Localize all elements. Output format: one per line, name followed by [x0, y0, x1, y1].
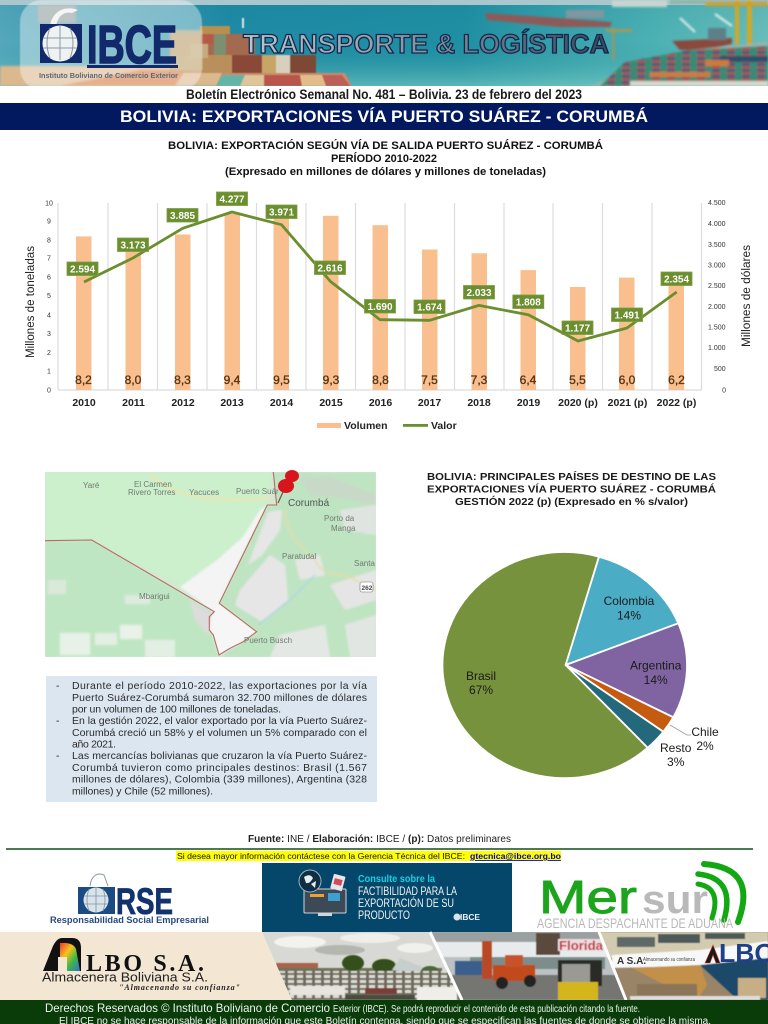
- gridlines: [58, 203, 702, 390]
- right axis ticks: 2.500: [708, 283, 726, 290]
- text block: key findings: -: [56, 715, 60, 727]
- text block: key findings: Corumbá creció un 58% y el volumen un 5% comparado con el: [72, 727, 367, 739]
- line value labels: [67, 192, 692, 334]
- text block: key findings: año 2021.: [72, 738, 116, 750]
- text block: key findings: [46, 676, 377, 802]
- icon: red map pins: [278, 470, 299, 503]
- pie labels: 2%: [696, 739, 714, 753]
- right axis ticks: 3.000: [708, 262, 726, 270]
- logo: RSE: RSE: [116, 881, 173, 922]
- map: Puerto Suárez - Corumbá: Corumbá: [288, 498, 330, 509]
- combo chart: volume bars and value line: 1.674: [417, 302, 442, 314]
- year labels: 2016: [369, 397, 392, 409]
- slice: Resto: [566, 665, 663, 748]
- right axis ticks: 1.500: [708, 324, 726, 332]
- logo: ALBO: LBO S.A.: [86, 951, 204, 977]
- banner: factibilidad: Consulte sobre la: [358, 874, 435, 885]
- bottom banner: ALBO photos: [0, 932, 768, 1000]
- contact note: Si desea mayor información contáctese con la Gerencia Técnica del IBCE:: [177, 851, 465, 861]
- legend: Volumen: [344, 420, 388, 432]
- bar value labels: 9,3: [323, 373, 340, 387]
- banner: factibilidad: [262, 863, 512, 933]
- line: valor: [84, 212, 677, 341]
- left axis ticks: 4: [47, 312, 51, 320]
- text block: key findings: -: [56, 750, 60, 762]
- photo: vehicle yard: [262, 932, 465, 1000]
- legend: [317, 420, 457, 432]
- icon: signal arcs: [698, 864, 743, 922]
- bar value labels: 9,4: [224, 373, 241, 387]
- photo: forklifts and aircraft: Florida: [559, 938, 604, 953]
- footer band: Exterior (IBCE). Se podrá reproducir el contenido de esta publicación citando la fuente.: [333, 1004, 640, 1015]
- year labels: 2018: [467, 397, 491, 409]
- map place names: Paratudal: [282, 552, 316, 561]
- contact note: gtecnica@ibce.org.bo: [470, 851, 561, 861]
- combo chart: volume bars and value line: 1.808: [516, 298, 541, 308]
- year labels: 2015: [319, 397, 343, 409]
- divider line: [6, 848, 753, 850]
- chart title: BOLIVIA: EXPORTACIÓN SEGÚN VÍA DE SALIDA PUERTO SUÁREZ - CORUMBÁ: [168, 139, 603, 152]
- map regions: [45, 472, 273, 587]
- combo chart: volume bars and value line: 2.354: [664, 274, 689, 286]
- pie labels: Resto: [660, 741, 692, 755]
- right axis ticks: 0: [722, 388, 726, 394]
- bar value labels: 8,8: [372, 373, 389, 387]
- photo: warehouse: Almacenando su confianza: [643, 957, 695, 963]
- map place names: Puerto Busch: [244, 636, 292, 645]
- photo: warehouse: [600, 932, 768, 1000]
- header banner: port and sea photo: [0, 0, 768, 90]
- map place names: [83, 480, 375, 645]
- bars: volumen: [76, 212, 684, 390]
- logo: ALBO: [42, 938, 240, 992]
- left axis ticks: 3: [47, 331, 51, 338]
- year labels: 2020 (p): [558, 397, 598, 409]
- photo: forklifts and aircraft: [430, 932, 630, 1000]
- bar value labels: 9,5: [273, 373, 290, 387]
- combo chart: volume bars and value line: 4.277: [219, 194, 245, 206]
- bar value labels: 8,3: [174, 373, 191, 387]
- logo: Mersur: sur: [642, 878, 708, 922]
- text block: key findings: Corumbá tuvieron como principales destinos: Brasil (1.567: [72, 762, 367, 774]
- left axis ticks: 10: [45, 200, 53, 208]
- combo chart: volume bars and value line: 2.594: [70, 264, 95, 276]
- pie chart: destinations: [442, 552, 719, 778]
- left axis ticks: [45, 200, 53, 394]
- combo chart: volume bars and value line: 3.885: [170, 211, 195, 222]
- pie labels: Chile: [691, 725, 719, 739]
- pie chart title: EXPORTACIONES VÍA PUERTO SUÁREZ - CORUMBÁ: [427, 482, 716, 496]
- icon: monitor: [299, 870, 346, 916]
- slice: Chile: [566, 665, 673, 732]
- pie labels: 14%: [644, 673, 668, 687]
- year labels: [72, 397, 696, 409]
- bar value labels: 6,4: [520, 373, 537, 387]
- right axis ticks: 1.000: [708, 345, 726, 352]
- chart title: PERÍODO 2010-2022: [331, 152, 437, 165]
- bar value labels: 7,3: [471, 373, 488, 387]
- left axis ticks: 7: [47, 256, 51, 262]
- pie labels: Argentina: [630, 658, 682, 672]
- map place names: Mbarigui: [139, 592, 170, 601]
- combo chart: volume bars and value line: [25, 192, 753, 432]
- photo: warehouse: A S.A.: [617, 956, 646, 967]
- pie labels: 67%: [469, 683, 493, 697]
- map place names: Yaré: [83, 481, 100, 490]
- logo: IBCE: [39, 8, 178, 80]
- right axis ticks: 2.000: [708, 304, 726, 311]
- bar value labels: 8,2: [75, 373, 92, 387]
- year labels: 2010: [72, 397, 96, 409]
- text block: key findings: por un volumen de 100 millones de toneladas.: [72, 704, 281, 716]
- logo: RSE: [50, 874, 209, 925]
- combo chart: volume bars and value line: 3.971: [269, 208, 294, 218]
- chart title: (Expresado en millones de dólares y millones de toneladas): [225, 166, 546, 178]
- right axis ticks: 4.000: [708, 221, 726, 228]
- slice: Colombia: [566, 557, 678, 665]
- combo chart: volume bars and value line: 1.690: [367, 302, 393, 313]
- left axis ticks: 6: [47, 274, 51, 282]
- left axis ticks: 9: [47, 218, 51, 226]
- logo: RSE: Responsabilidad Social Empresarial: [50, 915, 209, 925]
- map place names: Puerto Suár: [236, 487, 279, 496]
- logo: Mersur: [537, 864, 743, 931]
- combo chart: volume bars and value line: 1.177: [565, 324, 590, 334]
- left axis ticks: 2: [47, 350, 51, 357]
- banner: factibilidad: EXPORTACIÓN DE SU: [358, 897, 454, 910]
- chart title: [168, 139, 603, 178]
- bar value labels: [75, 373, 685, 387]
- source note: Fuente: INE / Elaboración: IBCE / (p): Datos preliminares: [248, 834, 511, 845]
- map place names: El Carmen: [134, 480, 172, 489]
- left axis ticks: 1: [47, 368, 51, 376]
- combo chart: volume bars and value line: Millones de dólares: [741, 245, 753, 347]
- bar value labels: 6,2: [668, 373, 685, 387]
- pie labels: Brasil: [466, 669, 496, 683]
- pie labels: 3%: [667, 755, 685, 769]
- bar value labels: 5,5: [569, 373, 586, 387]
- footer band: [0, 1000, 768, 1024]
- combo chart: volume bars and value line: 2.616: [317, 264, 343, 274]
- pie labels: 14%: [617, 608, 641, 622]
- logo: IBCE: IBCE: [87, 15, 177, 75]
- logo: ALBO: Almacenera Boliviana S.A.: [42, 970, 208, 984]
- logo: ALBO: "Almacenando su confianza": [119, 983, 240, 992]
- main heading band: [0, 103, 768, 130]
- pie labels: Colombia: [604, 594, 655, 608]
- combo chart: volume bars and value line: 2.033: [466, 288, 492, 299]
- year labels: 2012: [171, 397, 195, 409]
- year labels: 2019: [517, 397, 540, 409]
- axis titles: Millones de toneladas: [25, 246, 37, 358]
- banner: factibilidad: IBCE: [460, 913, 481, 922]
- right axis ticks: 4.500: [708, 200, 726, 207]
- right axis ticks: 3.500: [708, 242, 726, 249]
- slice: Argentina: [566, 623, 687, 717]
- pie chart title: [427, 470, 716, 508]
- pie chart title: BOLIVIA: PRINCIPALES PAÍSES DE DESTINO DE LAS: [427, 470, 716, 483]
- photo dividers: [430, 932, 626, 1000]
- text block: key findings: Las mercancías bolivianas que cruzaron la vía Puerto Suárez-: [72, 750, 368, 762]
- bar value labels: 7,5: [421, 373, 438, 387]
- legend: Valor: [431, 420, 457, 432]
- logo: IBCE: Instituto Boliviano de Comercio Exterior: [39, 71, 178, 80]
- banner title: TRANSPORTE & LOGÍSTICA: [243, 28, 609, 59]
- banner: factibilidad: FACTIBILIDAD PARA LA: [358, 886, 457, 898]
- map place names: Manga: [331, 524, 356, 533]
- banner: factibilidad: PRODUCTO: [358, 910, 410, 922]
- map place names: Yacuces: [189, 488, 219, 497]
- text block: key findings: -: [56, 680, 60, 692]
- bar value labels: 6,0: [619, 373, 636, 387]
- year labels: 2021 (p): [608, 397, 647, 409]
- slice: Brasil: [442, 552, 648, 778]
- bulletin line: Boletín Electrónico Semanal No. 481 – Bolivia. 23 de febrero del 2023: [186, 86, 582, 102]
- pie labels: [466, 594, 719, 769]
- left axis ticks: 8: [47, 238, 51, 244]
- left axis ticks: 5: [47, 293, 51, 300]
- leader line: Chile: [670, 725, 691, 735]
- map place names: Rivero Torres: [128, 488, 175, 497]
- map place names: Santa: [354, 559, 375, 568]
- logo: Mersur: Mer: [539, 871, 637, 923]
- year labels: 2014: [270, 397, 293, 409]
- pie chart title: GESTIÓN 2022 (p) (Expresado en % s/valor): [455, 495, 688, 508]
- left axis ticks: 0: [47, 388, 51, 394]
- year labels: 2011: [122, 397, 145, 409]
- right axis ticks: [708, 200, 726, 394]
- year labels: 2022 (p): [657, 397, 696, 409]
- text block: key findings: Puerto Suárez-Corumbá sumaron 32.700 millones de dólares: [72, 692, 367, 704]
- combo chart: volume bars and value line: 1.491: [614, 310, 640, 322]
- text block: key findings: millones de dólares), Colombia (339 millones), Argentina (328: [72, 774, 367, 786]
- map: Puerto Suárez - Corumbá: 262: [362, 585, 373, 592]
- map place names: Porto da: [324, 514, 355, 523]
- year labels: 2013: [220, 397, 244, 409]
- combo chart: volume bars and value line: 3.173: [120, 240, 146, 252]
- text block: key findings: millones) y Chile (52 millones).: [72, 786, 213, 798]
- year labels: 2017: [418, 397, 441, 409]
- footer band: Derechos Reservados © Instituto Boliviano de Comercio: [45, 1001, 330, 1015]
- border line: [45, 472, 277, 655]
- map: Puerto Suárez - Corumbá: [45, 470, 376, 657]
- text block: key findings: Durante el período 2010-2022, las exportaciones por la vía: [72, 680, 367, 692]
- main heading band: BOLIVIA: EXPORTACIONES VÍA PUERTO SUÁREZ - CORUMBÁ: [120, 107, 648, 126]
- right axis ticks: 500: [714, 366, 726, 373]
- text block: key findings: En la gestión 2022, el valor exportado por la vía Puerto Suárez-: [72, 715, 368, 727]
- icon: rainbow A: [43, 938, 81, 971]
- icon: globe: [40, 24, 82, 63]
- bar value labels: 8,0: [125, 373, 142, 387]
